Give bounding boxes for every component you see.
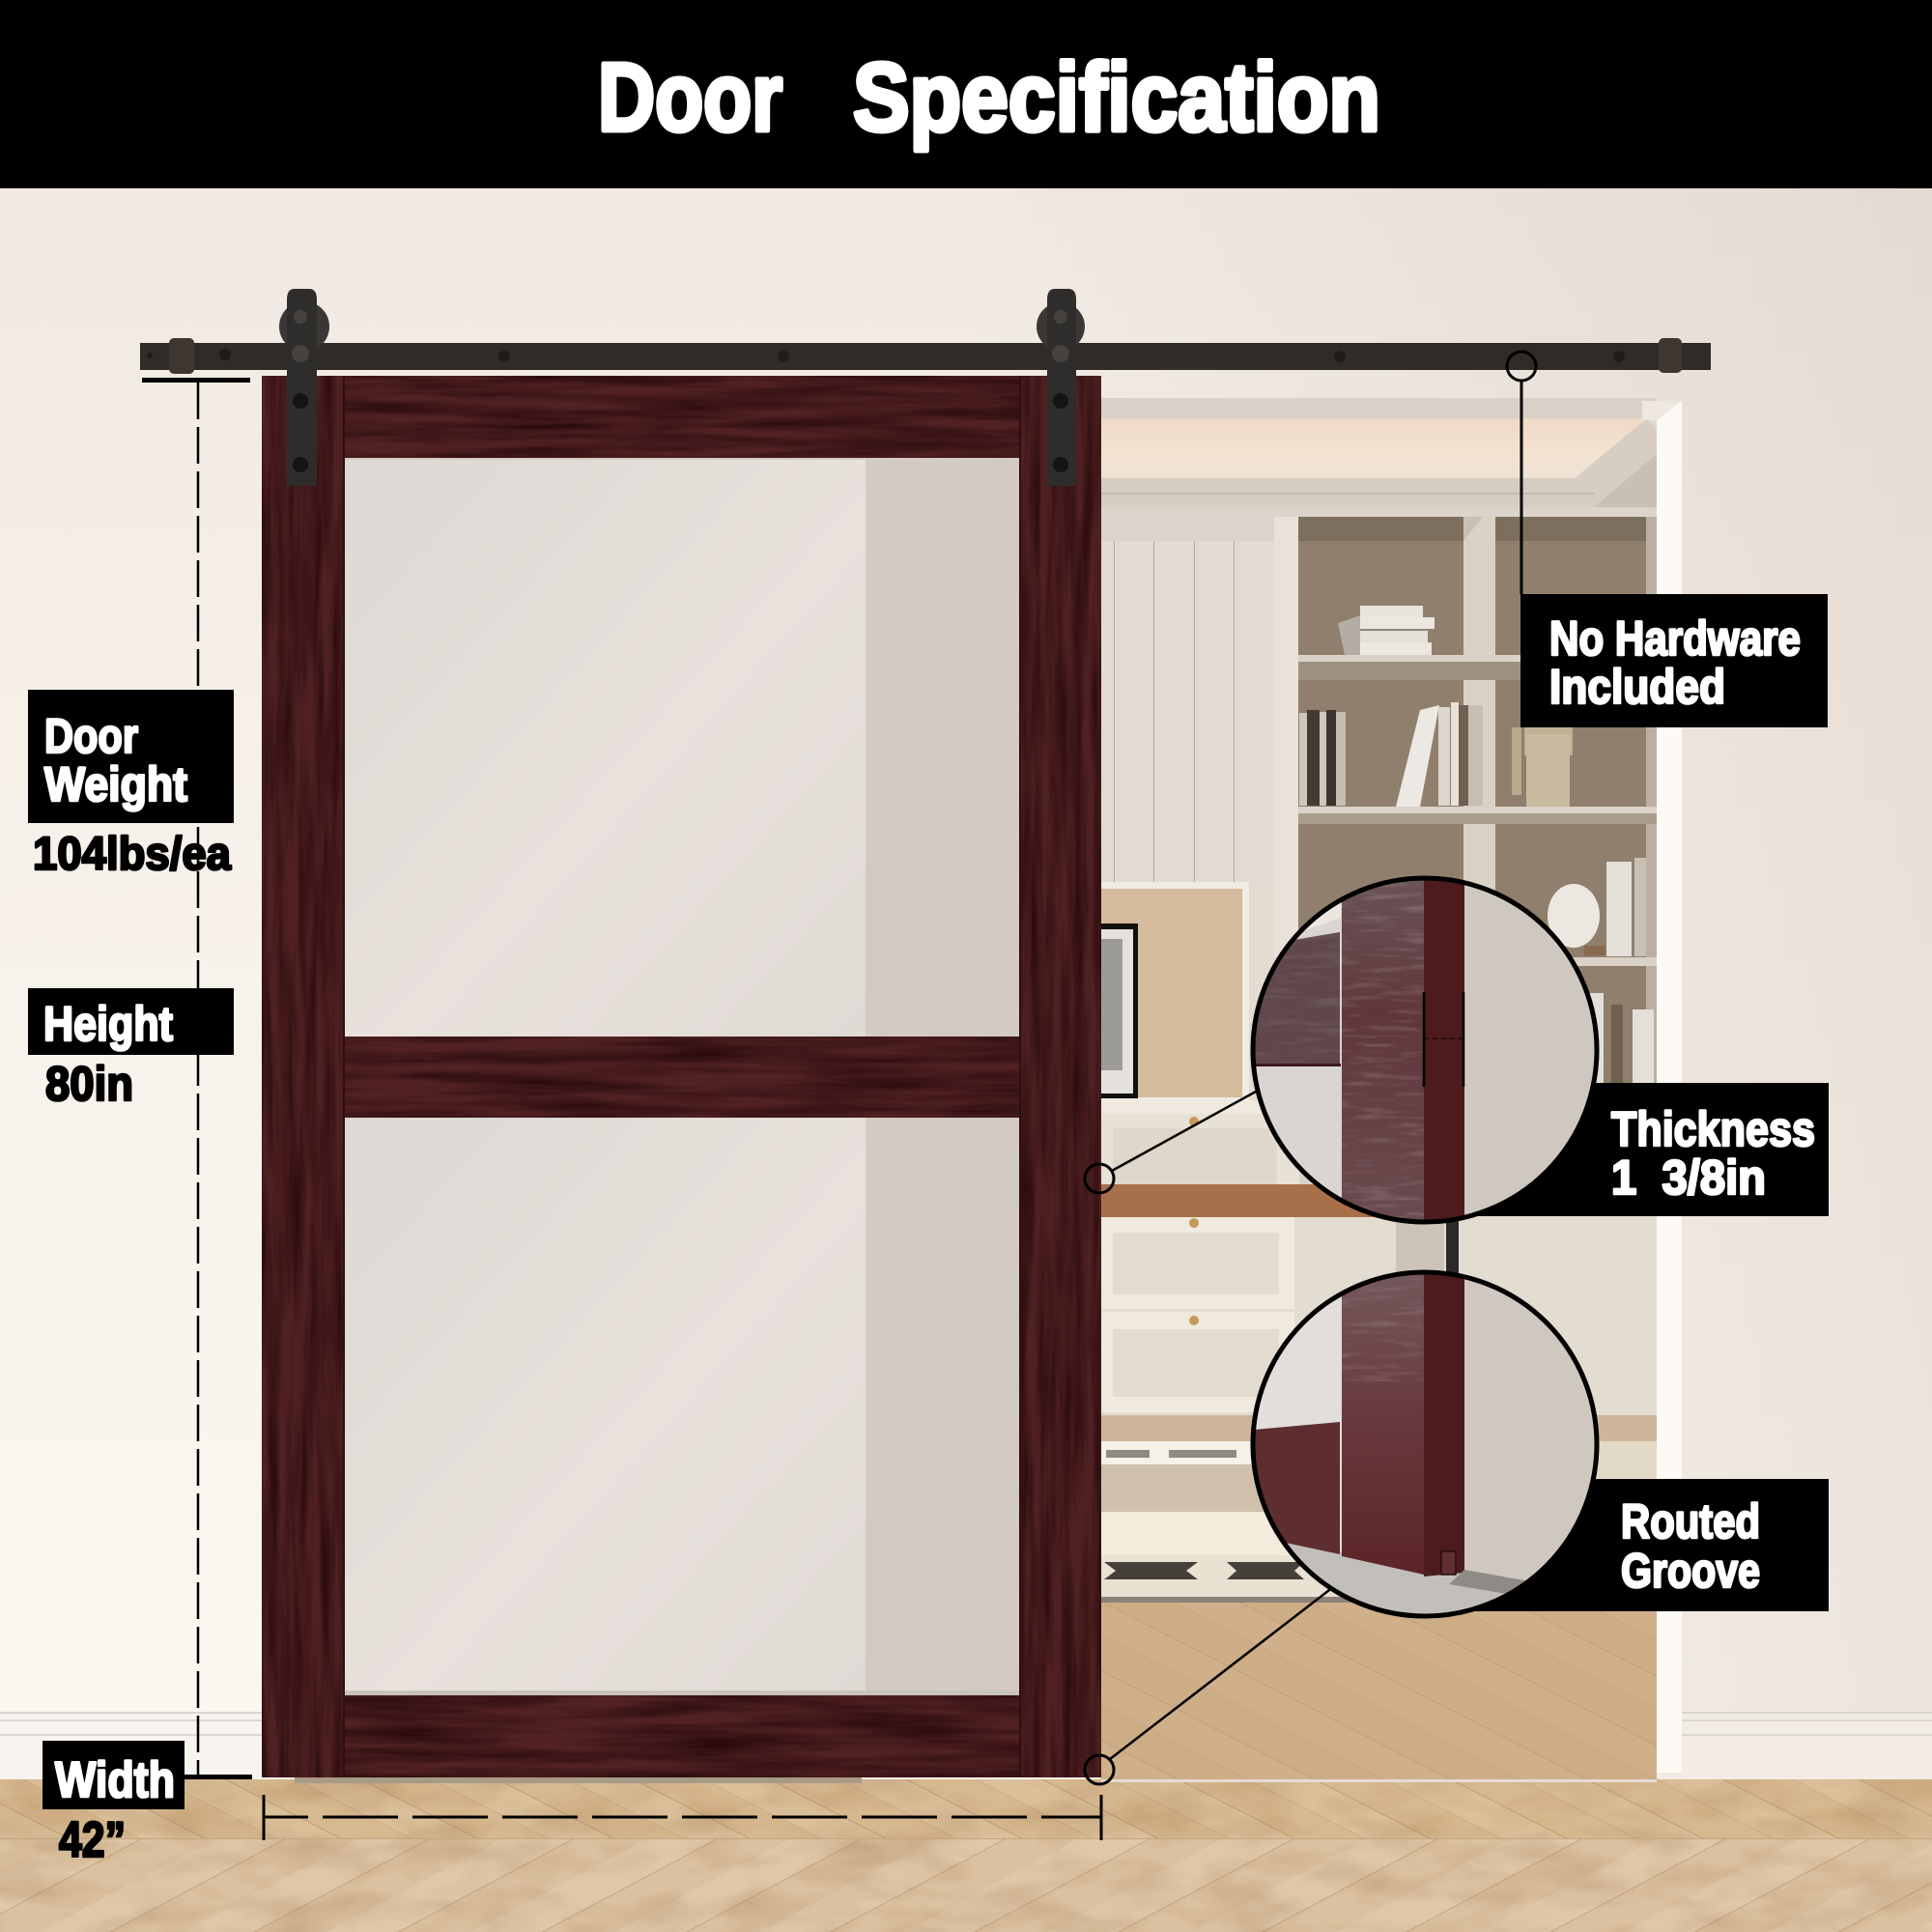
title: Specification bbox=[853, 43, 1380, 152]
title banner bbox=[0, 0, 1932, 188]
label box: no hardware included bbox=[1520, 594, 1828, 727]
title: Door bbox=[598, 43, 782, 152]
label box: no hardware included: Included bbox=[1549, 660, 1725, 714]
label box: height: Height bbox=[43, 997, 173, 1051]
label box: thickness: 1 3/8in bbox=[1611, 1151, 1766, 1205]
left hanger bbox=[279, 289, 329, 486]
width dimension line bbox=[185, 1775, 1101, 1840]
label box: thickness: Thickness bbox=[1611, 1102, 1815, 1156]
lit ceiling cove bbox=[1101, 418, 1642, 478]
label box: height bbox=[28, 988, 234, 1055]
dark table leg bbox=[1446, 1217, 1459, 1277]
label box: routed groove bbox=[1449, 1479, 1829, 1611]
label box: thickness bbox=[1449, 1083, 1829, 1216]
sculpture bbox=[1512, 726, 1573, 807]
stacked books bbox=[1338, 606, 1435, 655]
title bbox=[598, 43, 1380, 152]
magnified lens: door thickness bbox=[1246, 869, 1604, 1232]
beadboard wall panel bbox=[1101, 541, 1274, 889]
barn door track bbox=[140, 338, 1711, 374]
door weight value: 104lbs/ea bbox=[33, 829, 231, 880]
barn door bbox=[262, 376, 1101, 1783]
door jamb bbox=[1642, 401, 1682, 1773]
label box: routed groove: Routed bbox=[1621, 1494, 1760, 1548]
label box: no hardware included: No Hardware bbox=[1549, 611, 1801, 666]
label box: routed groove: Groove bbox=[1621, 1544, 1760, 1598]
walnut desktop bbox=[1101, 1184, 1391, 1217]
framed art bbox=[1101, 882, 1249, 1100]
vase and books bbox=[1548, 858, 1646, 956]
label box: door weight bbox=[28, 690, 234, 823]
label box: door weight: Door bbox=[44, 709, 138, 763]
top rail bbox=[344, 376, 1020, 458]
callout lines and markers bbox=[1085, 352, 1536, 1784]
baseboard bbox=[0, 1712, 1932, 1779]
bottom rail bbox=[344, 1695, 1020, 1777]
room seen through the doorway bbox=[1101, 398, 1657, 1782]
right hanger bbox=[1037, 289, 1085, 486]
bookshelf bbox=[1274, 517, 1657, 1116]
height value: 80in bbox=[45, 1057, 133, 1111]
left stile bbox=[262, 376, 344, 1777]
label box: width: Width bbox=[55, 1752, 175, 1808]
magnified lens: routed groove bbox=[1246, 1265, 1604, 1633]
right stile bbox=[1020, 376, 1101, 1777]
room floor and rug bbox=[1101, 1415, 1657, 1779]
lower books bbox=[1589, 993, 1654, 1101]
door floor shadow bbox=[295, 1776, 862, 1783]
door joints bbox=[343, 376, 1021, 1777]
wood floor bbox=[0, 1779, 1932, 1932]
thickness dimension marks bbox=[1424, 992, 1463, 1087]
upright books bbox=[1299, 702, 1483, 807]
middle rail bbox=[344, 1037, 1020, 1118]
width value: 42” bbox=[59, 1812, 126, 1868]
frosted glass panels bbox=[344, 458, 1020, 1695]
crown moulding bbox=[1101, 418, 1657, 507]
label box: door weight: Weight bbox=[44, 757, 187, 811]
height dimension line bbox=[142, 378, 250, 1776]
cabinet counter and drawers bbox=[1101, 1100, 1657, 1415]
